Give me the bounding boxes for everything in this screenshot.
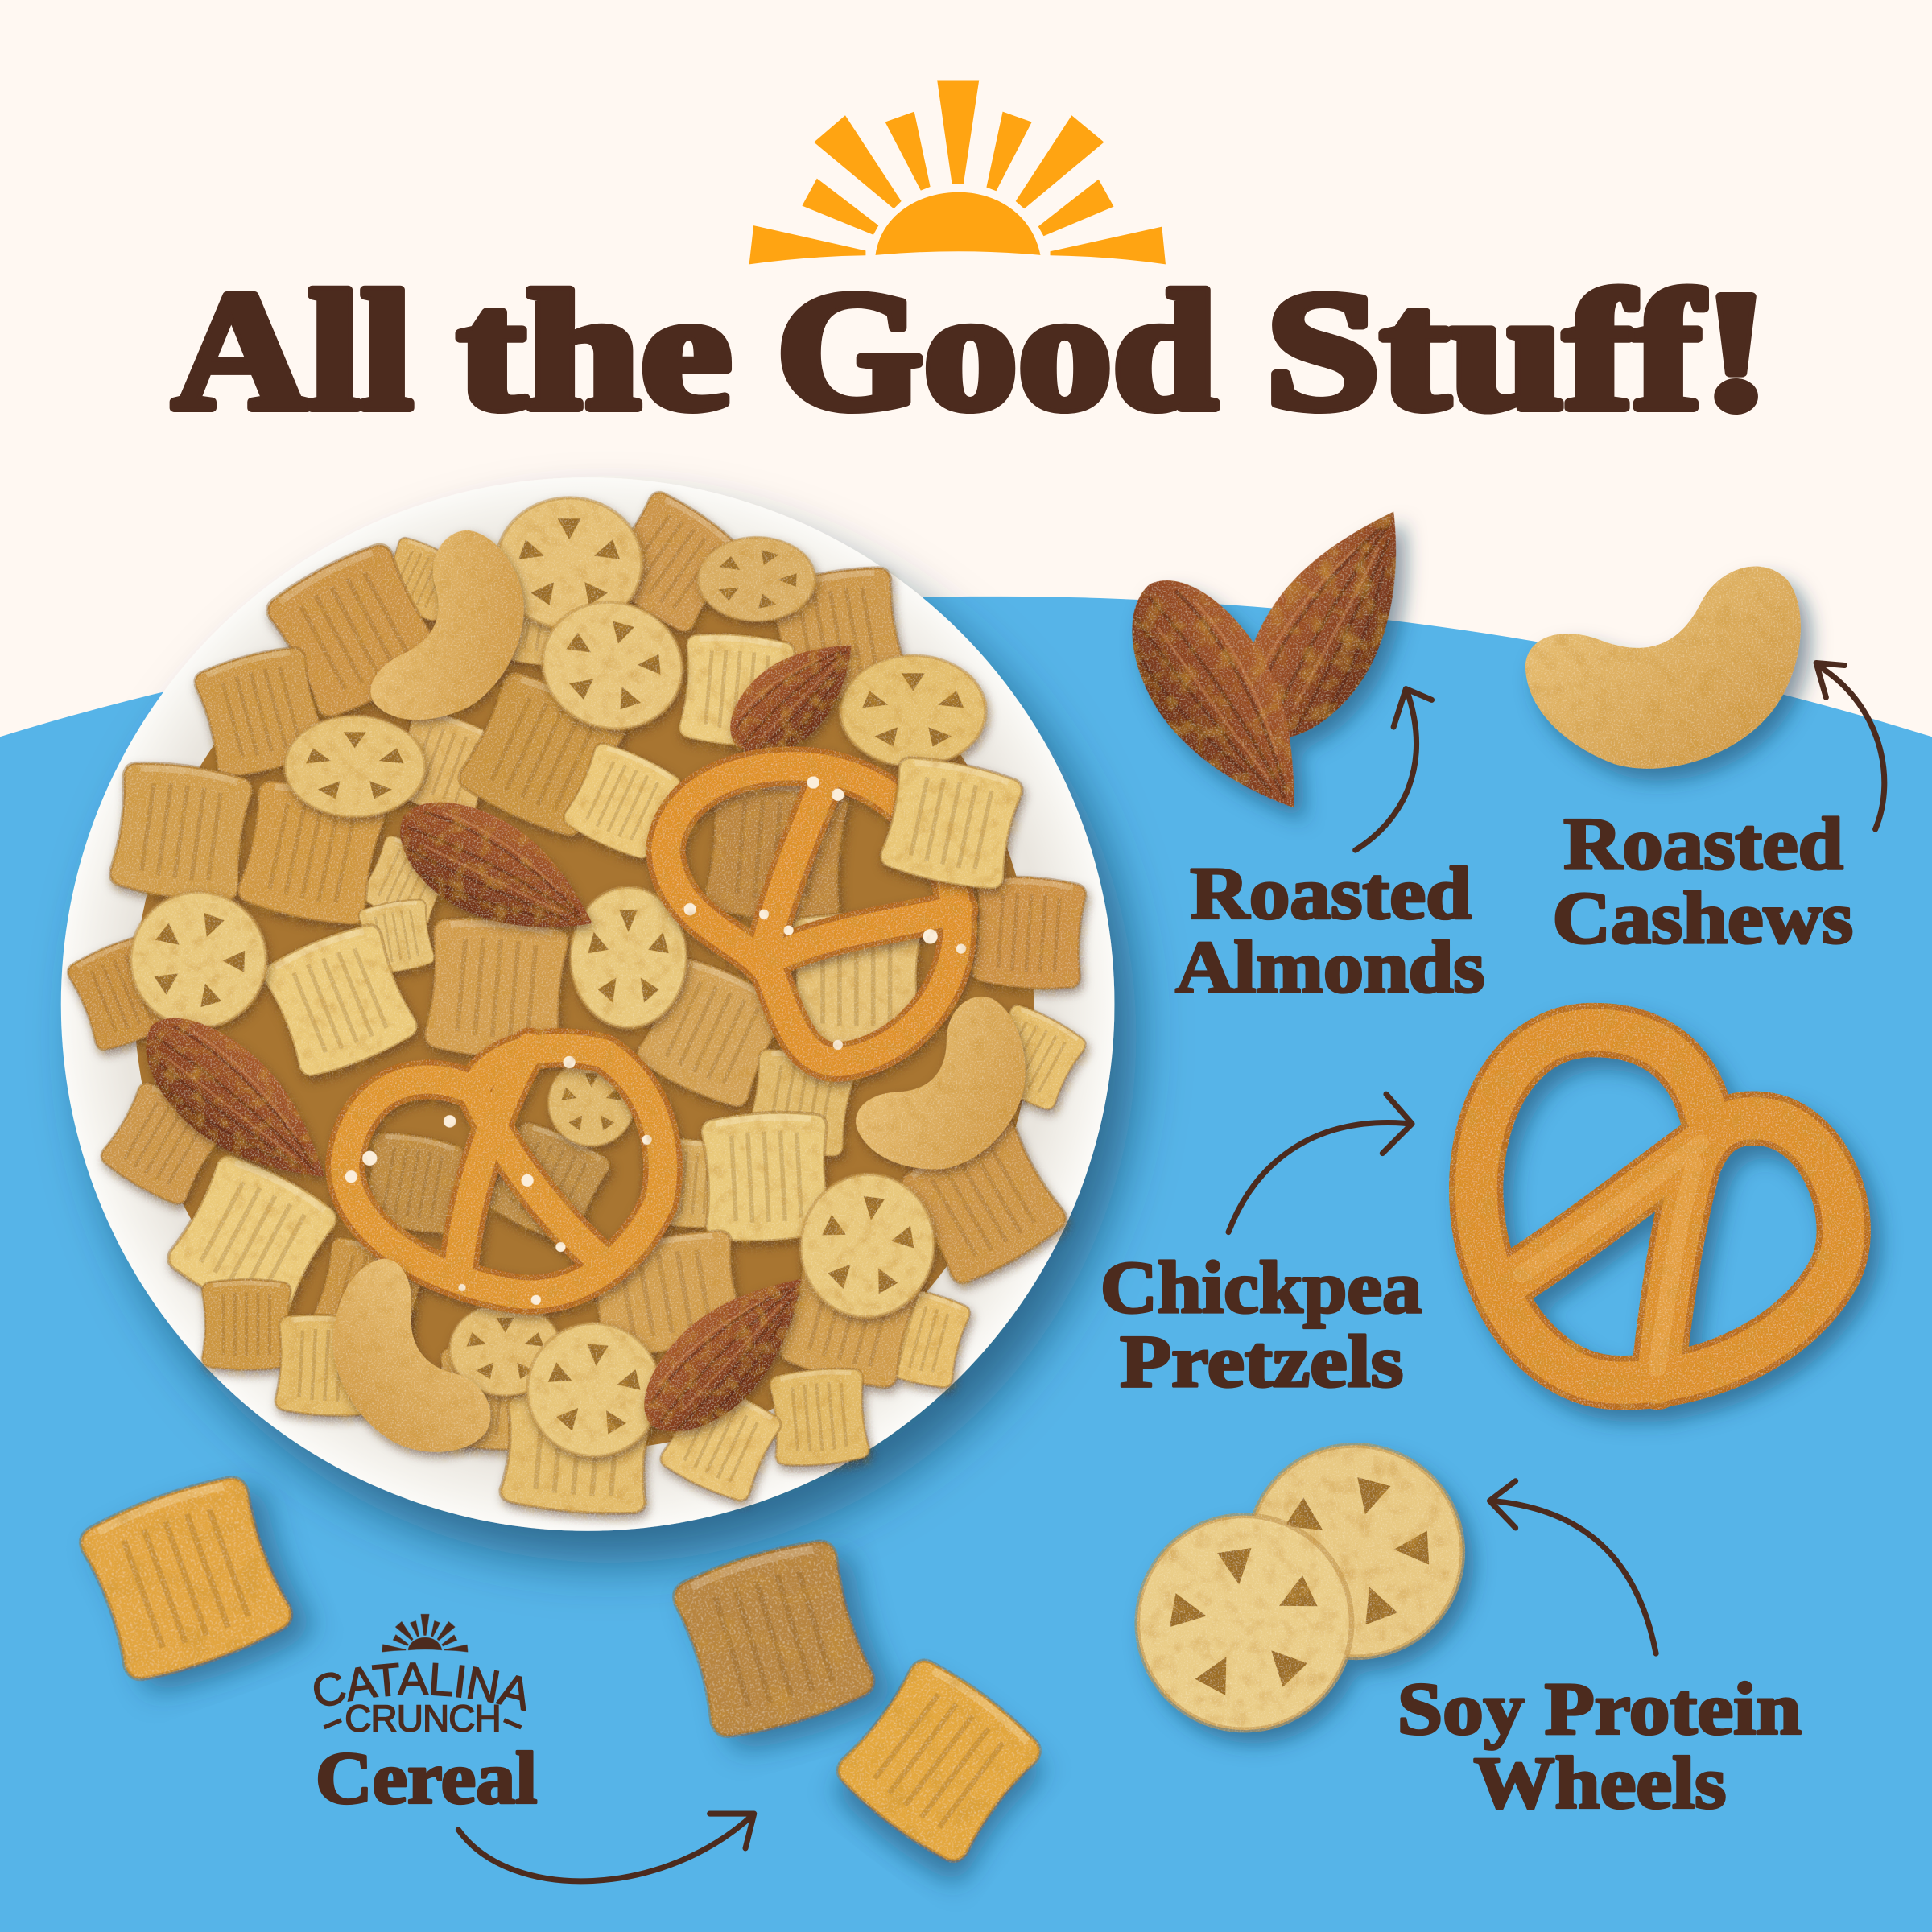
- logo text CRUNCH: CRUNCH: [345, 1698, 501, 1740]
- bowl pretzels: [345, 766, 966, 1305]
- logo dashes: [324, 1720, 521, 1728]
- almond: left: [1097, 555, 1343, 840]
- label: Roasted Almonds: Almonds: [1175, 926, 1484, 1008]
- arrow: almonds: [1356, 689, 1432, 850]
- title: All: [172, 257, 413, 445]
- label: Roasted Cashews: Cashews: [1553, 877, 1853, 959]
- label: Roasted Cashews: Roasted: [1563, 803, 1843, 885]
- loose cereal piece: orange: [829, 1651, 1049, 1871]
- bowl of snack mix: [62, 478, 1114, 1530]
- logo wordmark arc: [316, 1695, 531, 1713]
- brand logo: [275, 1582, 526, 1740]
- icon: logo sun: [382, 1614, 468, 1652]
- title: Stuff!: [1265, 257, 1770, 445]
- label: Cereal: Cereal: [316, 1736, 537, 1818]
- arrow: pretzels: [1228, 1094, 1412, 1232]
- white bowl: [62, 478, 1114, 1530]
- label: Roasted Almonds: Roasted: [1191, 852, 1472, 934]
- label: Soy Protein Wheels: Wheels: [1474, 1741, 1726, 1823]
- label: Chickpea Pretzels: Pretzels: [1120, 1320, 1403, 1402]
- label: Soy Protein Wheels: [1397, 1668, 1802, 1823]
- chickpea pretzel: [1476, 1030, 1843, 1383]
- pretzel salt: [345, 776, 966, 1305]
- almond: right: [1213, 483, 1443, 766]
- icon: orange sun: [749, 80, 1166, 264]
- label: Roasted Almonds: [1175, 852, 1484, 1008]
- title: [172, 257, 1770, 445]
- cashew: [1525, 566, 1801, 769]
- bowl food base: [134, 551, 1034, 1451]
- pretzel: bottom left: [345, 1047, 663, 1294]
- label: Soy Protein Wheels: Soy Protein: [1397, 1668, 1802, 1750]
- loose cereal piece: cinnamon: [669, 1533, 879, 1745]
- label: Chickpea Pretzels: Chickpea: [1100, 1246, 1422, 1328]
- title: Good: [776, 257, 1217, 445]
- bowl cereal pieces: [64, 485, 1090, 1518]
- label: Roasted Cashews: [1553, 803, 1853, 959]
- label: Chickpea Pretzels: [1100, 1246, 1422, 1402]
- bowl almonds: [118, 616, 877, 1459]
- blue curved panel: [0, 597, 1932, 1932]
- wheel: front: [1124, 1501, 1365, 1744]
- bowl cashews: [312, 517, 1059, 1474]
- arrow: wheels: [1490, 1481, 1656, 1653]
- pretzel: top right: [666, 766, 959, 1062]
- soy protein wheels: [1124, 1421, 1486, 1744]
- bowl protein wheels: [112, 497, 985, 1462]
- arrow: cashews: [1816, 663, 1885, 829]
- loose cereal piece: left: [75, 1468, 298, 1689]
- bowl front cereal: [877, 752, 1025, 894]
- logo text CATALINA: CATALINA: [314, 1662, 526, 1711]
- bowl contents: [64, 485, 1090, 1518]
- wheel: back: [1224, 1421, 1486, 1682]
- arrow: cereal: [458, 1814, 754, 1881]
- almonds: [1097, 483, 1443, 840]
- title: the: [457, 257, 732, 445]
